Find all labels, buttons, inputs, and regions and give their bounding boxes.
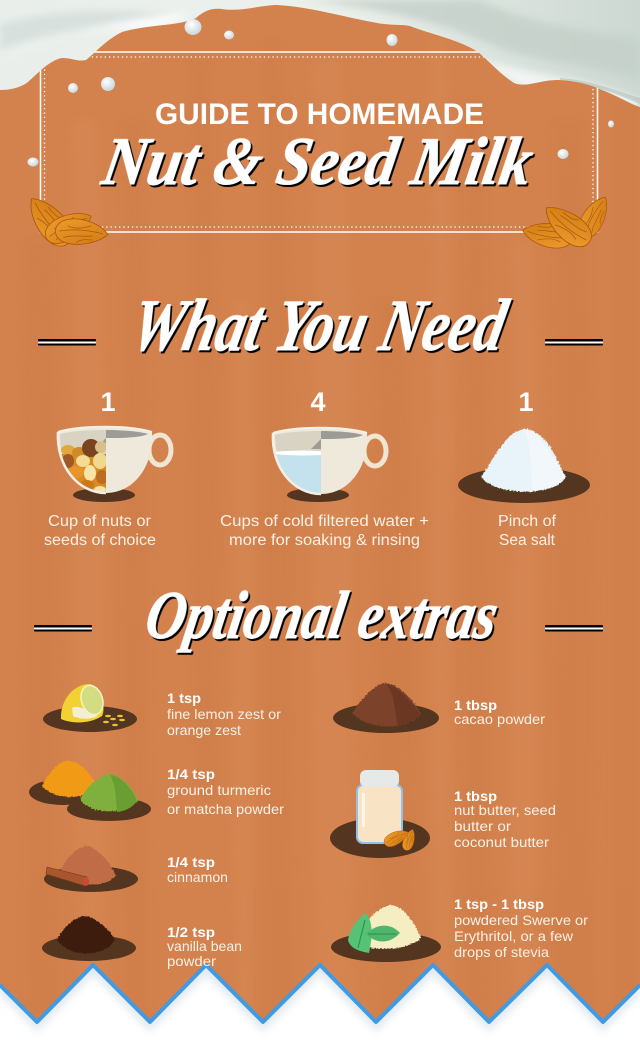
extra: lemon zest: orange zest (167, 722, 241, 738)
extra: nut butter jar: 1 tbsp (454, 788, 497, 804)
extra: turmeric and matcha: ground turmeric (167, 782, 271, 798)
ingredient: cup of nuts: seeds of choice (44, 532, 156, 549)
extra: cacao powder: cacao powder (454, 711, 545, 727)
extra: sweetener and stevia (331, 896, 588, 962)
ingredient: sea salt: Pinch of (498, 513, 557, 530)
extra: vanilla bean powder: vanilla bean (167, 938, 242, 954)
extra: lemon zest (43, 682, 281, 738)
extra: nut butter jar: nut butter, seed (454, 802, 556, 818)
extra: sweetener and stevia: 1 tsp - 1 tbsp (454, 896, 544, 912)
extra: turmeric and matcha (29, 761, 284, 821)
ingredient: sea salt (458, 387, 590, 549)
milk splash (0, 0, 640, 108)
extra: nut butter jar (330, 770, 556, 858)
extra: nut butter jar: coconut butter (454, 834, 549, 850)
milk droplets (28, 19, 614, 166)
extra: cinnamon: cinnamon (167, 869, 228, 885)
extra: nut butter jar: butter or (454, 818, 511, 834)
ingredient: cups of water: 4 (310, 387, 326, 417)
extra: lemon zest: 1 tsp (167, 690, 201, 706)
extra: vanilla bean powder (42, 916, 242, 969)
icon: almonds left (21, 190, 109, 253)
ingredient: cups of water: Cups of cold filtered water + (220, 513, 429, 530)
ingredient: cup of nuts (44, 387, 171, 549)
title: nut and seed milk: Nut & Seed Milk (96, 123, 539, 199)
extra: sweetener and stevia: powdered Swerve or (454, 912, 588, 928)
extra: cinnamon: 1/4 tsp (167, 854, 215, 870)
ingredient: sea salt: 1 (518, 387, 534, 417)
heading: guide to homemade: GUIDE TO HOMEMADE (155, 98, 484, 131)
extra: sweetener and stevia: Erythritol, or a few (454, 928, 574, 944)
section heading: optional extras: Optional extras (140, 577, 504, 653)
section heading: what you need: What You Need (124, 285, 515, 367)
ingredient: cups of water (220, 387, 429, 549)
extra: turmeric and matcha: 1/4 tsp (167, 766, 215, 782)
extra: cacao powder (333, 683, 545, 733)
ingredient: cups of water: more for soaking & rinsing (229, 532, 420, 549)
icon: almonds right (521, 192, 615, 253)
extra: turmeric and matcha: or matcha powder (167, 801, 284, 817)
extra: sweetener and stevia: drops of stevia (454, 944, 549, 960)
ingredient: sea salt: Sea salt (499, 532, 556, 549)
extra: cinnamon (44, 846, 228, 892)
extra: cacao powder: 1 tbsp (454, 697, 497, 713)
title frame (40, 52, 598, 232)
extra: lemon zest: fine lemon zest or (167, 706, 281, 722)
extra: vanilla bean powder: 1/2 tsp (167, 924, 215, 940)
ingredient: cup of nuts: Cup of nuts or (48, 513, 151, 530)
ingredient: cup of nuts: 1 (100, 387, 116, 417)
extra: vanilla bean powder: powder (167, 953, 216, 969)
